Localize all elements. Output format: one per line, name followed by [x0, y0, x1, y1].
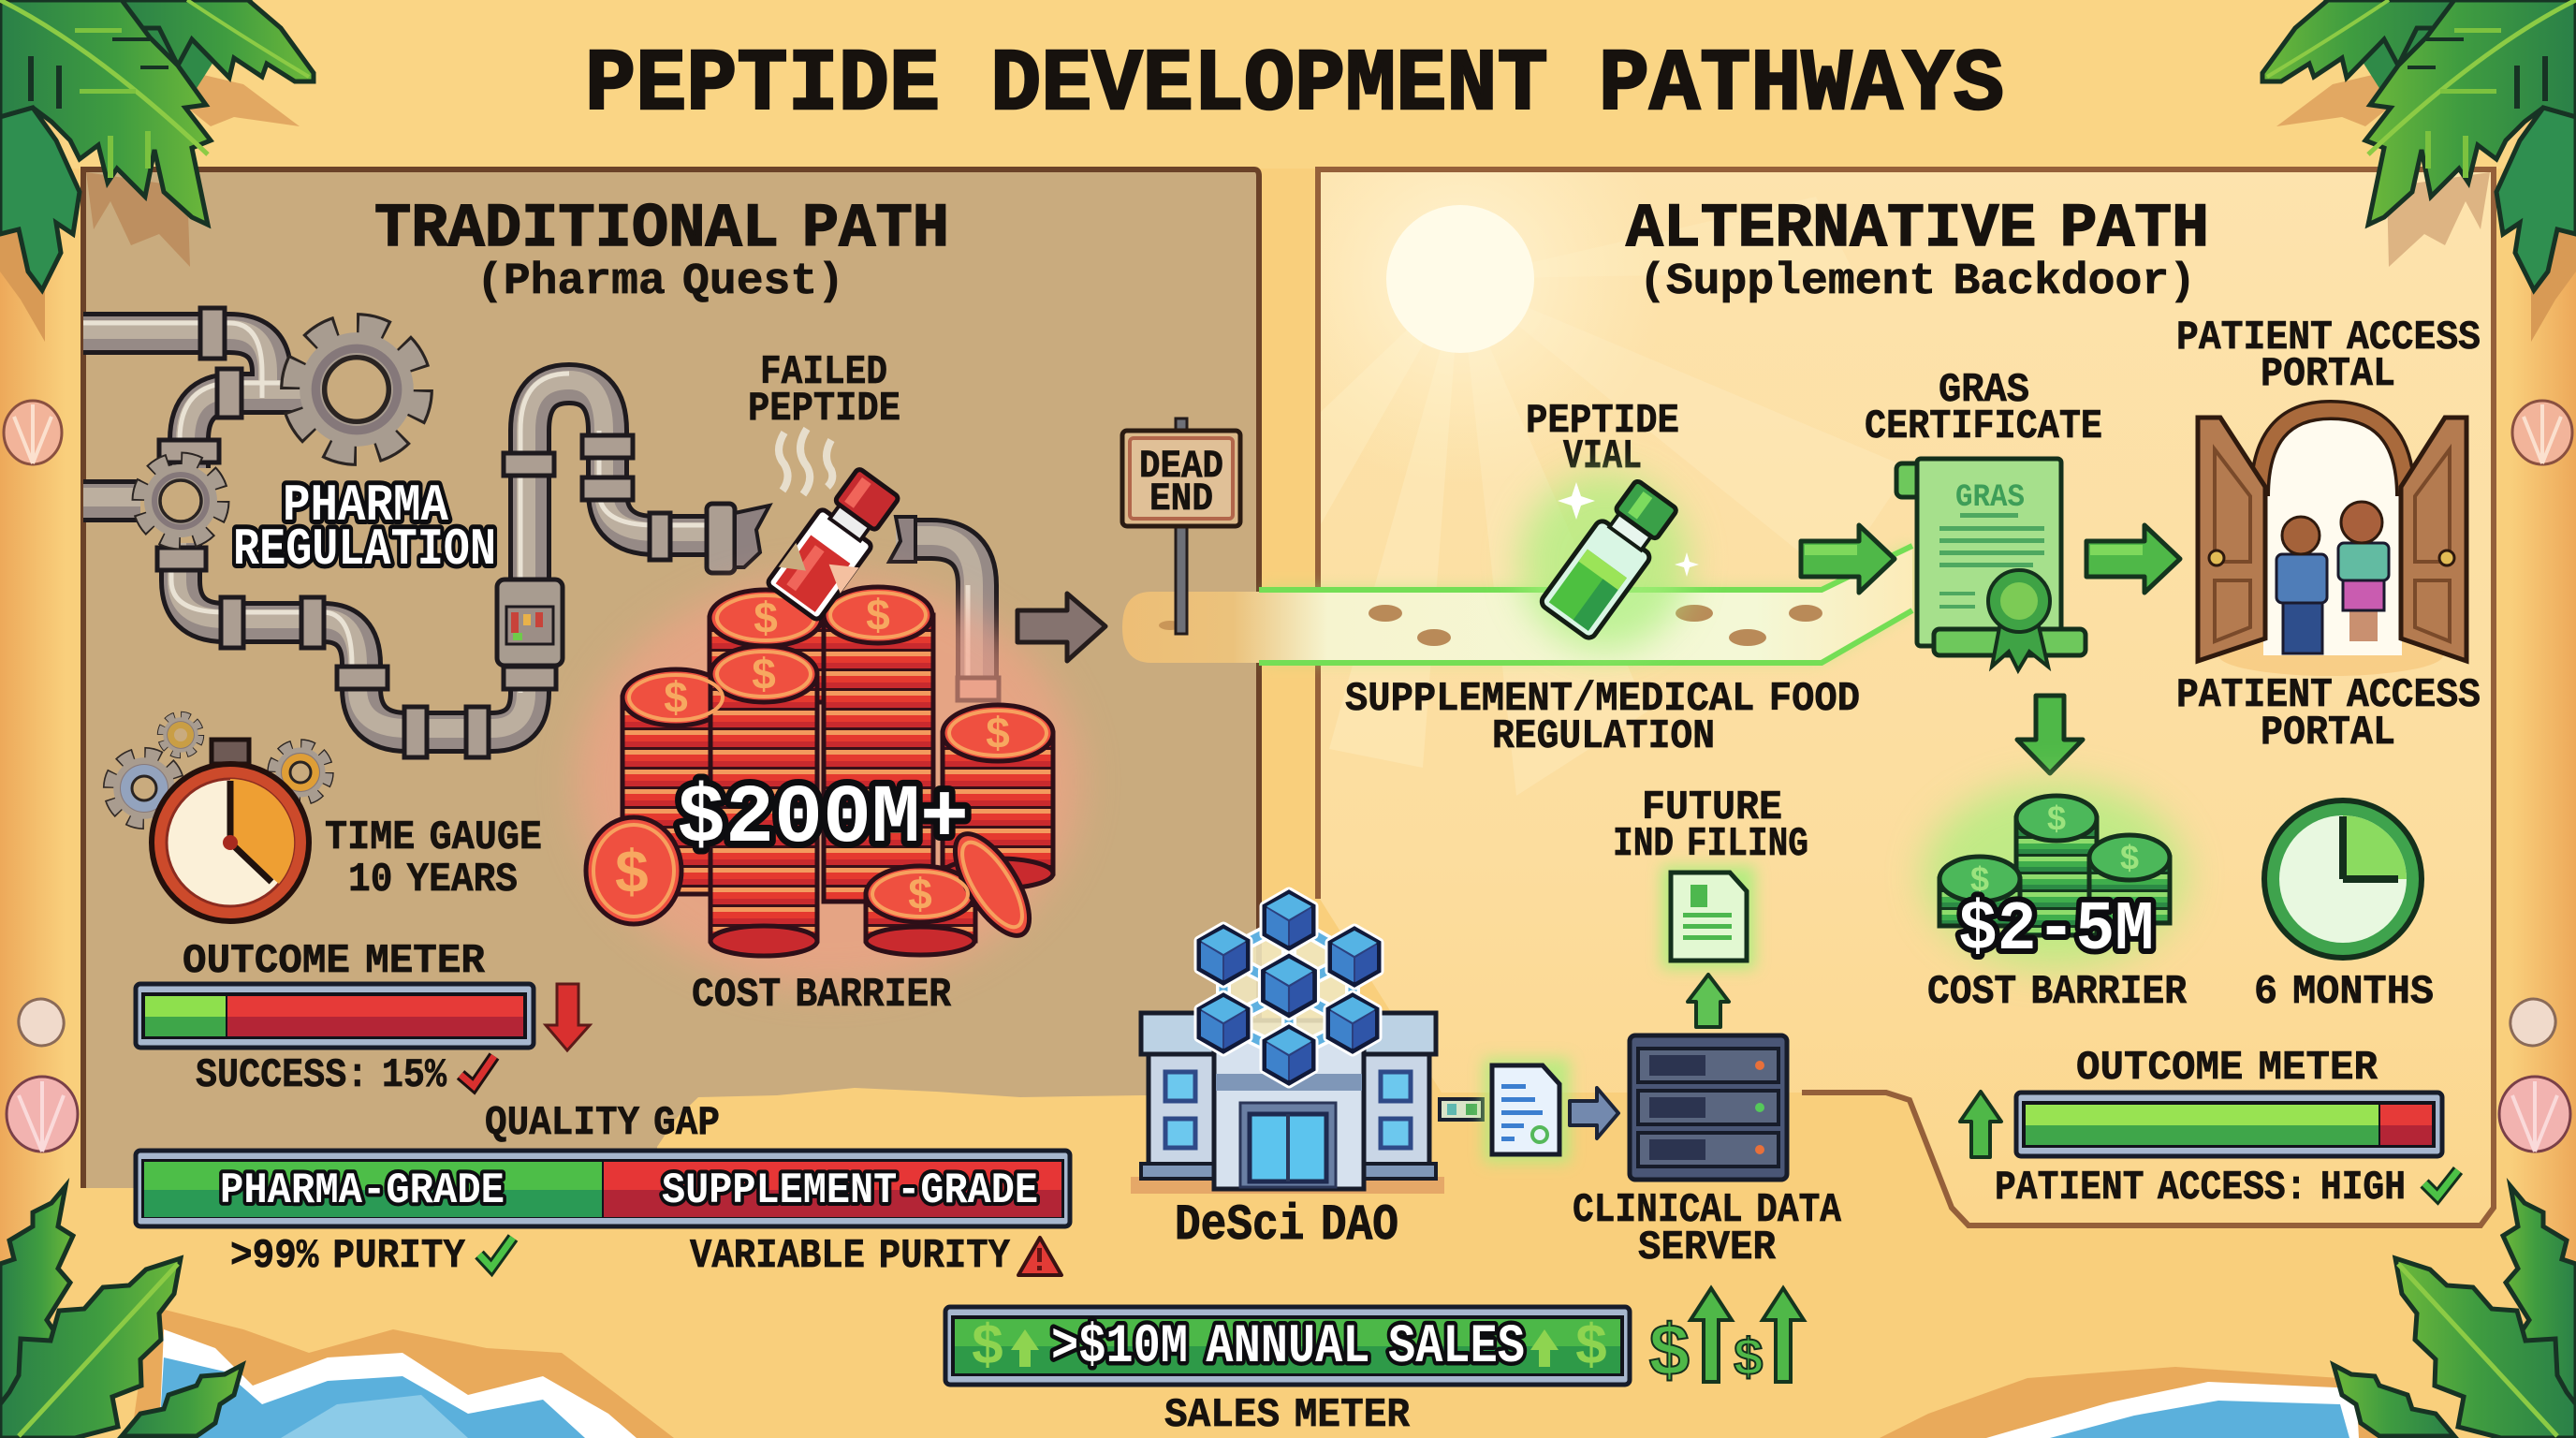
icon: desci building [1131, 1013, 1444, 1194]
label: supplement regulation: REGULATION [1492, 713, 1715, 760]
green coin stacks [1924, 782, 2186, 969]
label: pharma regulation: REGULATION [233, 520, 496, 580]
label: pharma regulation [233, 476, 496, 580]
value: $200M+: $200M+ [677, 773, 969, 866]
sun [1321, 172, 1896, 796]
icon: stopwatch [110, 715, 329, 921]
label: failed peptide: PEPTIDE [748, 386, 900, 433]
icon: broken red vial [767, 464, 906, 623]
label: patient access portal top [2176, 315, 2481, 398]
palm fronds: bottom left [0, 1186, 242, 1438]
meter: annual sales [945, 1307, 1630, 1385]
pipe broken ends [735, 506, 915, 567]
icon: patient access portal [2198, 410, 2466, 676]
arrow: document to server [1570, 1088, 1618, 1138]
label: time gauge [325, 814, 542, 903]
icon: green vial [1520, 473, 1699, 651]
icon: warning triangle [1018, 1238, 1061, 1275]
label: future ind filing [1613, 785, 1808, 868]
arrow: certificate down to cost [2017, 696, 2083, 773]
label: pharma regulation: PHARMA [283, 476, 448, 536]
label: patient access portal bottom: PATIENT ACCESS [2176, 672, 2481, 719]
label: patient access high: PATIENT ACCESS: HIGH [1995, 1165, 2406, 1211]
pipeline: pharma regulation [83, 323, 977, 732]
shell: left lower [7, 1077, 78, 1152]
icon: rising sales arrows: $ [1733, 1330, 1764, 1390]
heading: traditional path: TRADITIONAL PATH [374, 194, 949, 264]
coin stacks: cost barrier [576, 576, 1081, 988]
palm shadow: top left [0, 66, 300, 342]
green coin stacks: $ [2119, 841, 2140, 879]
label: clinical data server: SERVER [1638, 1225, 1777, 1271]
label: peptide vial: VIAL [1563, 433, 1642, 480]
path: glowing road [1122, 543, 1912, 663]
shell: right middle [2504, 992, 2562, 1052]
coin stacks: cost barrier: $ [751, 653, 777, 701]
icon: check high [2424, 1170, 2458, 1196]
icon: steam [779, 429, 832, 494]
heading: alternative path: (Supplement Backdoor) [1639, 257, 2196, 307]
arrow: vial to certificate [1801, 525, 1895, 593]
label: failed peptide [748, 349, 900, 433]
panel: alternative path border [1318, 169, 2494, 1225]
label: desci dao: DeSci DAO [1175, 1197, 1398, 1255]
icon: red check [461, 1056, 494, 1086]
label: patient access portal top: PATIENT ACCESS [2176, 315, 2481, 361]
icon: rising sales arrows: $ [1647, 1314, 1691, 1397]
icon: data document [1484, 1058, 1570, 1163]
meter: alternative outcome [2016, 1093, 2442, 1156]
meter: quality gap [136, 1151, 1070, 1226]
arrow: outcome down [546, 984, 590, 1050]
pipe collars [157, 308, 999, 757]
icon: small gear [139, 460, 222, 542]
heading: alternative path [1626, 194, 2209, 307]
sign: dead end: END [1149, 477, 1213, 521]
water: bottom right [1880, 1367, 2378, 1438]
label: gras certificate [1865, 367, 2102, 450]
label: supplement regulation [1345, 676, 1860, 760]
shell: left middle [12, 992, 70, 1052]
coin stacks: cost barrier: $ [985, 712, 1011, 760]
label: time gauge: 10 YEARS [348, 857, 518, 903]
pipe gauge box [497, 580, 563, 666]
label: patient access portal bottom: PORTAL [2261, 710, 2395, 756]
label: six months: 6 MONTHS [2254, 969, 2434, 1016]
label: gras certificate: CERTIFICATE [1865, 404, 2102, 450]
icon: gras certificate: GRAS [1955, 480, 2025, 516]
heading: traditional path: (Pharma Quest) [476, 257, 844, 307]
label: quality gap: QUALITY GAP [485, 1100, 720, 1147]
icon: green clock [2264, 800, 2422, 958]
coin stacks: cost barrier: $ [907, 873, 933, 921]
label: patient access portal bottom [2176, 672, 2481, 756]
label: patient access portal top: PORTAL [2261, 351, 2395, 398]
title: PEPTIDE DEVELOPMENT PATHWAYS [585, 37, 2004, 136]
label: outcome meter alternative: OUTCOME METER [2076, 1045, 2378, 1092]
arrow: to dead end [1017, 594, 1105, 661]
palm fronds: top left [0, 0, 314, 290]
meter: annual sales: $ [1574, 1317, 1608, 1381]
palm shadow: top right [2276, 66, 2576, 342]
coin stacks: cost barrier: $ [753, 596, 779, 645]
label: clinical data server [1573, 1187, 1842, 1271]
label: peptide vial: PEPTIDE [1526, 398, 1679, 445]
label: purity supplement: VARIABLE PURITY [690, 1233, 1011, 1280]
label: time gauge: TIME GAUGE [325, 814, 542, 861]
label: gras certificate: GRAS [1939, 367, 2029, 414]
meter: annual sales: >$10M ANNUAL SALES [1051, 1317, 1525, 1378]
arrow: outcome up [1960, 1092, 2001, 1157]
sign: dead end [1122, 418, 1240, 634]
meter: annual sales: $ [971, 1317, 1004, 1381]
icon: clinical data server [1630, 1035, 1787, 1180]
icon: blockchain network [1199, 892, 1379, 1083]
icon: large gear [292, 325, 421, 454]
meter: quality gap: PHARMA-GRADE [220, 1167, 505, 1215]
label: sales meter: SALES METER [1164, 1392, 1411, 1438]
footprints [1159, 605, 1822, 646]
water: bottom left [131, 1306, 674, 1438]
meter: quality gap: SUPPLEMENT-GRADE [662, 1167, 1038, 1215]
sign: dead end: DEAD [1139, 444, 1223, 489]
panel: traditional path background [83, 169, 1259, 1188]
label: failed peptide: FAILED [760, 349, 887, 396]
label: future ind filing: IND FILING [1613, 821, 1808, 868]
heading: traditional path [374, 194, 949, 307]
icon: green check [479, 1238, 513, 1268]
value: $2-5M: $2-5M [1958, 891, 2154, 970]
label: cost barrier alternative: COST BARRIER [1927, 969, 2188, 1016]
icon: rising sales arrows [1647, 1288, 1804, 1397]
label: peptide vial [1526, 398, 1679, 480]
heading: alternative path: ALTERNATIVE PATH [1626, 194, 2209, 264]
icon: gras certificate [1896, 459, 2086, 670]
icon: small connector [1440, 1099, 1483, 1120]
label: supplement regulation: SUPPLEMENT/MEDICAL FOOD [1345, 676, 1860, 723]
palm fronds: bottom right [2334, 1186, 2576, 1438]
shell: right upper [2512, 401, 2572, 464]
palm fronds: top right [2262, 0, 2576, 290]
coin stacks: cost barrier: $ [865, 594, 891, 642]
label: clinical data server: CLINICAL DATA [1573, 1187, 1842, 1234]
label: outcome meter traditional: OUTCOME METER [183, 938, 486, 985]
green coin stacks: $ [2046, 801, 2067, 840]
label: future ind filing: FUTURE [1642, 785, 1782, 831]
panel: alternative path background [1320, 169, 2494, 1225]
label: success: SUCCESS: 15% [196, 1052, 447, 1099]
label: cost barrier traditional: COST BARRIER [692, 972, 952, 1019]
arrow: server to ind filing [1688, 975, 1729, 1027]
shell: right lower [2499, 1077, 2570, 1152]
coin stacks: cost barrier: $ [614, 843, 650, 910]
panel: traditional path border [83, 169, 1259, 1188]
shell: left upper [4, 401, 62, 464]
arrow: certificate to portal [2086, 525, 2180, 593]
label: purity pharma: >99% PURITY [230, 1233, 466, 1280]
icon: ind document [1661, 866, 1755, 969]
meter: traditional outcome [136, 984, 534, 1048]
coin stacks: cost barrier: $ [663, 676, 689, 725]
green coin stacks: $ [1969, 862, 1990, 901]
